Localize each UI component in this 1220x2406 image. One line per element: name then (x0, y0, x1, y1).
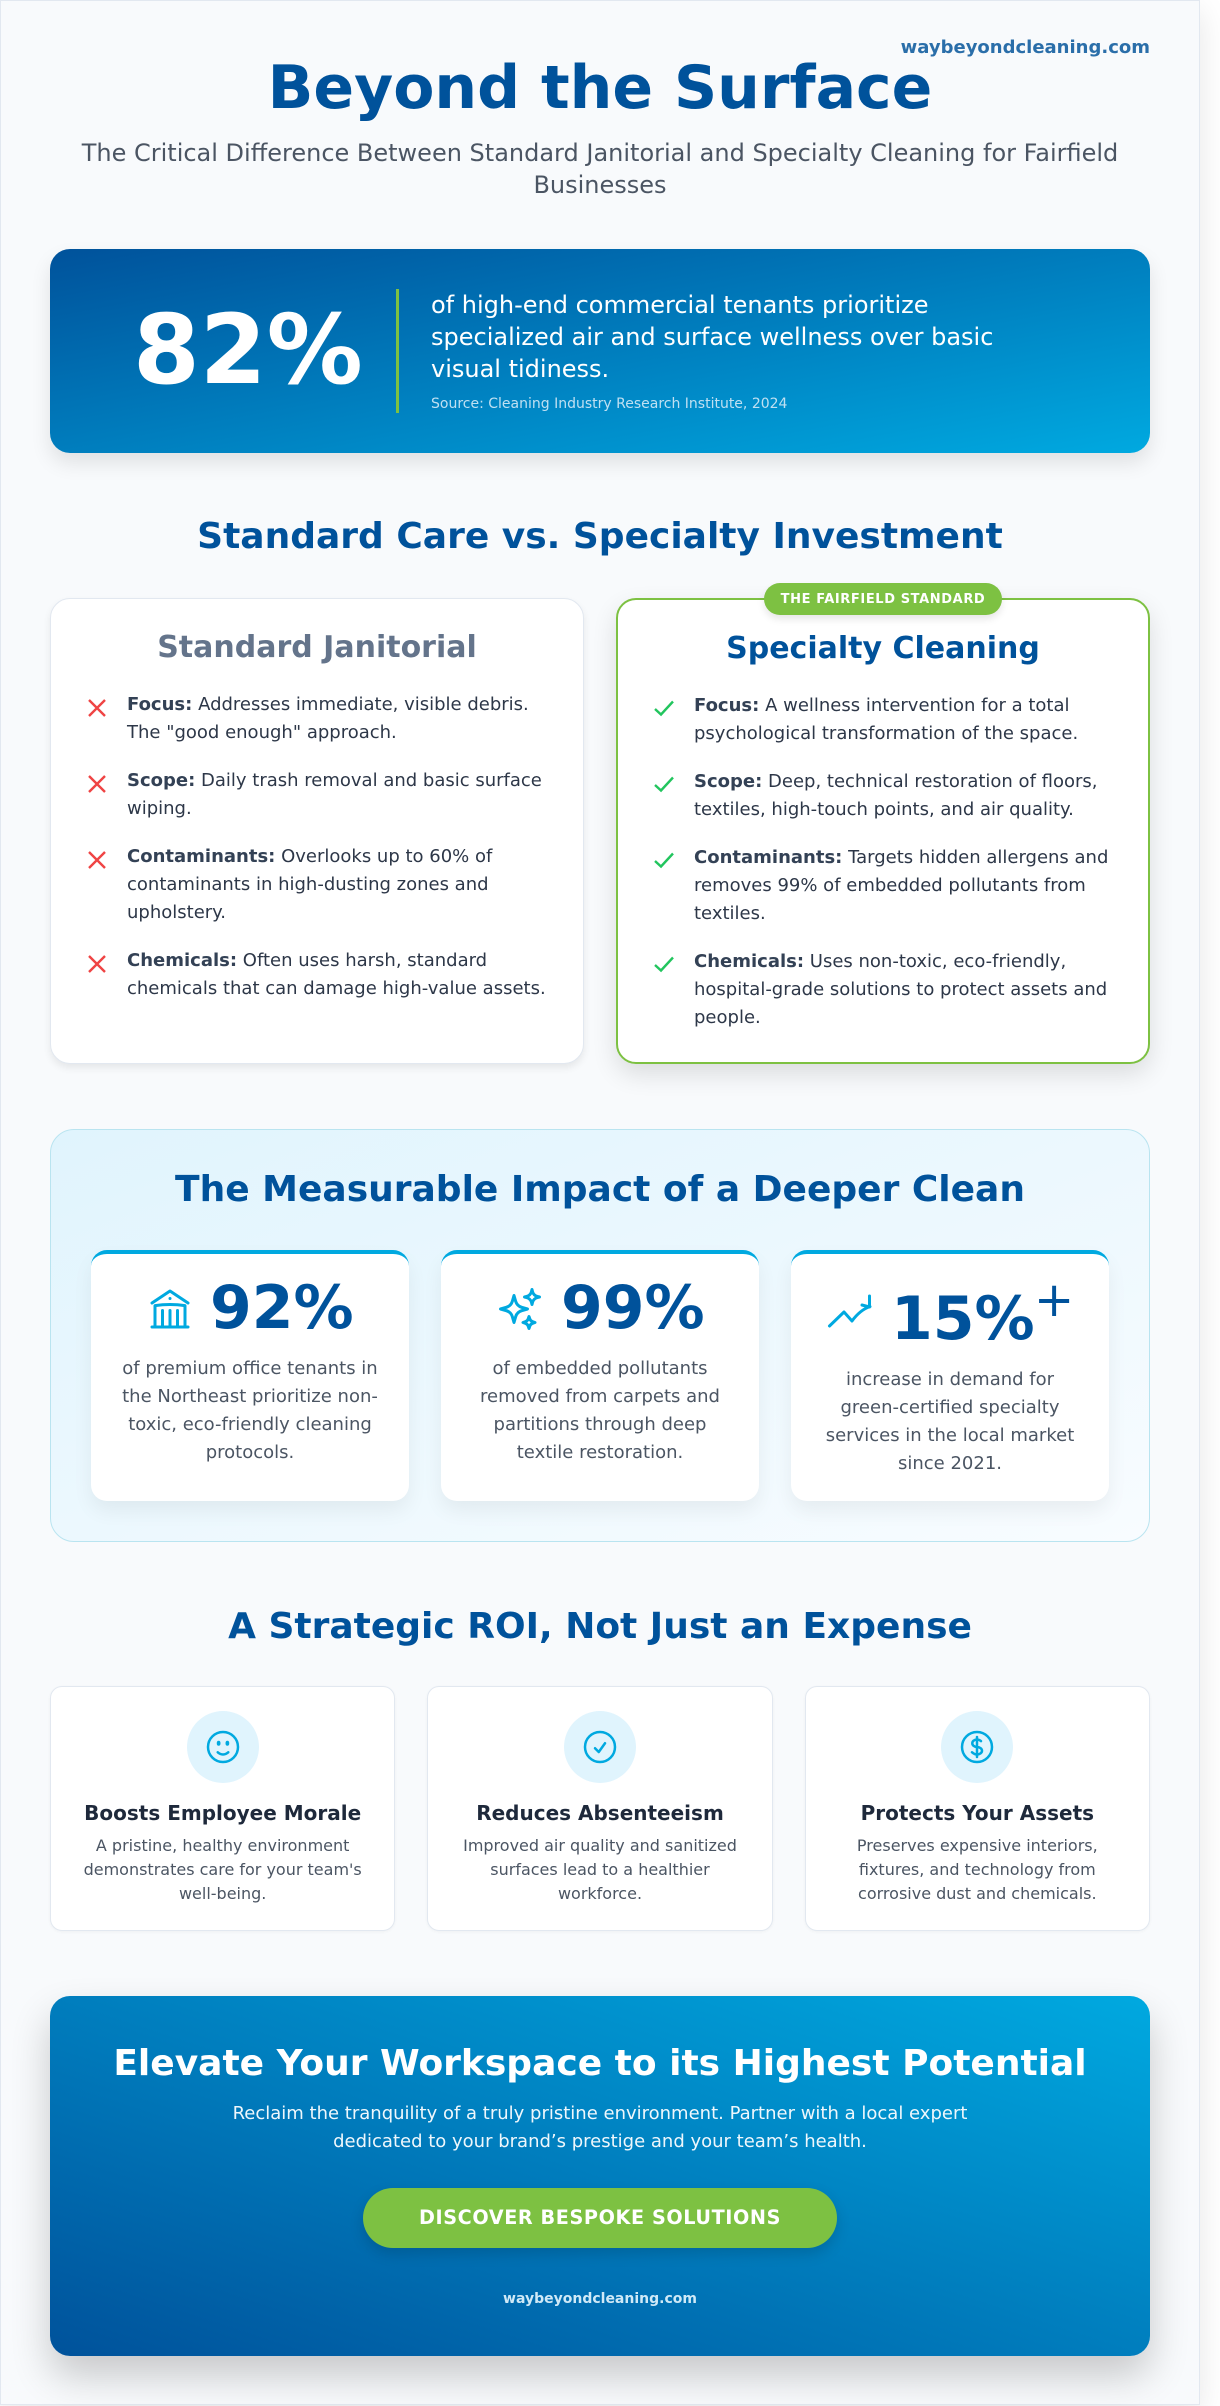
card text: workforce. (558, 1884, 642, 1903)
cta button (363, 2188, 837, 2248)
cta text (233, 2103, 967, 2152)
stat text: of embedded pollutants (492, 1358, 708, 1379)
icon: check circle (564, 1711, 636, 1783)
item: chemicals: chemicals that can damage high-value assets. (127, 978, 546, 999)
hero number: 82% (133, 294, 363, 406)
item: scope: Scope: Daily trash removal and basic surface (127, 770, 542, 791)
card text (84, 1836, 362, 1903)
panel: specialty cleaning (616, 598, 1150, 1064)
hero description (431, 291, 993, 383)
subtitle: Businesses (533, 171, 667, 199)
stat number: 99% (561, 1273, 705, 1343)
stat text: the Northeast prioritize non- (122, 1386, 378, 1407)
icon: check (654, 776, 674, 792)
item: focus: The "good enough" approach. (127, 722, 397, 743)
subtitle: The Critical Difference Between Standard Janitorial and Specialty Cleaning for Fairfield (82, 139, 1118, 167)
item: scope (694, 771, 1098, 820)
panel: standard janitorial (50, 598, 584, 1064)
item: scope: Scope: Deep, technical restoration of floors, (694, 771, 1098, 792)
icon: dollar (941, 1711, 1013, 1783)
stat card: 99% (441, 1250, 759, 1501)
card heading: Standard Janitorial (157, 630, 477, 665)
item: chemicals (694, 951, 1107, 1028)
subtitle (82, 139, 1118, 199)
website link: waybeyondcleaning.com (901, 37, 1150, 58)
item: chemicals: Chemicals: Often uses harsh, standard (127, 950, 487, 971)
plus sign: + (1034, 1272, 1074, 1328)
icon: building (150, 1290, 190, 1328)
item: scope: textiles, high-touch points, and air quality. (694, 799, 1074, 820)
item: contaminants (694, 847, 1108, 924)
item: chemicals: Chemicals: Uses non-toxic, eco-friendly, (694, 951, 1066, 972)
icon: check (654, 700, 674, 716)
card text: A pristine, healthy environment (96, 1836, 349, 1855)
item: scope (127, 770, 542, 819)
stat text: of premium office tenants in (122, 1358, 378, 1379)
icon: trending up (828, 1294, 872, 1328)
card text: well-being. (179, 1884, 266, 1903)
panel: protects your assets (805, 1686, 1150, 1931)
card title: Reduces Absenteeism (476, 1801, 724, 1825)
stat text: removed from carpets and (480, 1386, 720, 1407)
stat card: 92% (91, 1250, 409, 1501)
cta text: Reclaim the tranquility of a truly pristine environment. Partner with a local expert (233, 2103, 967, 2124)
stat text: increase in demand for (846, 1369, 1054, 1390)
card text: corrosive dust and chemicals. (858, 1884, 1097, 1903)
card heading: Specialty Cleaning (726, 631, 1040, 666)
card text: surfaces lead to a healthier (490, 1860, 710, 1879)
item: focus (126, 694, 529, 743)
card text (857, 1836, 1098, 1903)
item: contaminants (127, 846, 493, 923)
item: focus: Focus: A wellness intervention for a total (694, 695, 1070, 716)
stat text (122, 1358, 378, 1463)
stat number: 92% (210, 1273, 354, 1343)
item: scope: wiping. (127, 798, 192, 819)
card text: Preserves expensive interiors, (857, 1836, 1098, 1855)
card title: Boosts Employee Morale (84, 1801, 361, 1825)
card text: Improved air quality and sanitized (463, 1836, 737, 1855)
card title: Protects Your Assets (861, 1801, 1094, 1825)
cta button: DISCOVER BESPOKE SOLUTIONS (419, 2206, 781, 2229)
card text: demonstrates care for your team's (84, 1860, 362, 1879)
icon: cross (88, 955, 106, 973)
hero description: of high-end commercial tenants prioritize (431, 291, 928, 319)
item: contaminants: contaminants in high-dusting zones and (127, 874, 489, 895)
stat text: protocols. (206, 1442, 294, 1463)
panel: reduces absenteeism (427, 1686, 773, 1931)
stat text: services in the local market (826, 1425, 1074, 1446)
hero source: Source: Cleaning Industry Research Institute, 2024 (431, 396, 787, 412)
panel: measurable impact (50, 1129, 1150, 1542)
hero description: specialized air and surface wellness over basic (431, 323, 993, 351)
item: chemicals (127, 950, 546, 999)
badge: THE FAIRFIELD STANDARD (781, 592, 985, 607)
icon: cross (88, 699, 106, 717)
stat card: 15%+ (791, 1250, 1109, 1501)
title: Beyond the Surface (268, 53, 932, 123)
icon: cross (88, 851, 106, 869)
stat text (480, 1358, 720, 1463)
panel: hero statistic (50, 249, 1150, 453)
stat text: textile restoration. (517, 1442, 683, 1463)
stat text: since 2021. (898, 1453, 1002, 1474)
card text: fixtures, and technology from (859, 1860, 1096, 1879)
item: contaminants: Contaminants: Targets hidden allergens and (694, 847, 1108, 868)
stat text: partitions through deep (494, 1414, 706, 1435)
icon: check (654, 956, 674, 972)
panel: boosts employee morale (50, 1686, 395, 1931)
hero description: visual tidiness. (431, 355, 609, 383)
item: contaminants: upholstery. (127, 902, 226, 923)
stat number: 15% (891, 1284, 1035, 1354)
item: contaminants: textiles. (694, 903, 766, 924)
item: focus: psychological transformation of the space. (694, 723, 1078, 744)
cta heading: Elevate Your Workspace to its Highest Potential (113, 2043, 1087, 2084)
hero divider (396, 289, 399, 413)
stat text (826, 1369, 1074, 1474)
panel: call to action (50, 1996, 1150, 2356)
heading: comparison: Standard Care vs. Specialty Investment (197, 516, 1003, 557)
icon: sparkles (499, 1288, 541, 1330)
section heading: The Measurable Impact of a Deeper Clean (175, 1169, 1025, 1210)
stat text: toxic, eco-friendly cleaning (128, 1414, 372, 1435)
item: focus: Focus: Addresses immediate, visible debris. (127, 694, 529, 715)
badge (764, 583, 1002, 615)
icon: cross (88, 775, 106, 793)
icon: smile (187, 1711, 259, 1783)
item: chemicals: people. (694, 1007, 761, 1028)
icon: check (654, 852, 674, 868)
cta website: waybeyondcleaning.com (503, 2291, 697, 2307)
cta text: dedicated to your brand’s prestige and your team’s health. (333, 2131, 867, 2152)
item: focus (694, 695, 1078, 744)
card text (463, 1836, 737, 1903)
item: contaminants: Contaminants: Overlooks up to 60% of (127, 846, 492, 867)
heading: strategic ROI: A Strategic ROI, Not Just an Expense (228, 1606, 972, 1647)
item: contaminants: removes 99% of embedded pollutants from (694, 875, 1086, 896)
item: chemicals: hospital-grade solutions to protect assets and (694, 979, 1107, 1000)
stat text: green-certified specialty (840, 1397, 1060, 1418)
